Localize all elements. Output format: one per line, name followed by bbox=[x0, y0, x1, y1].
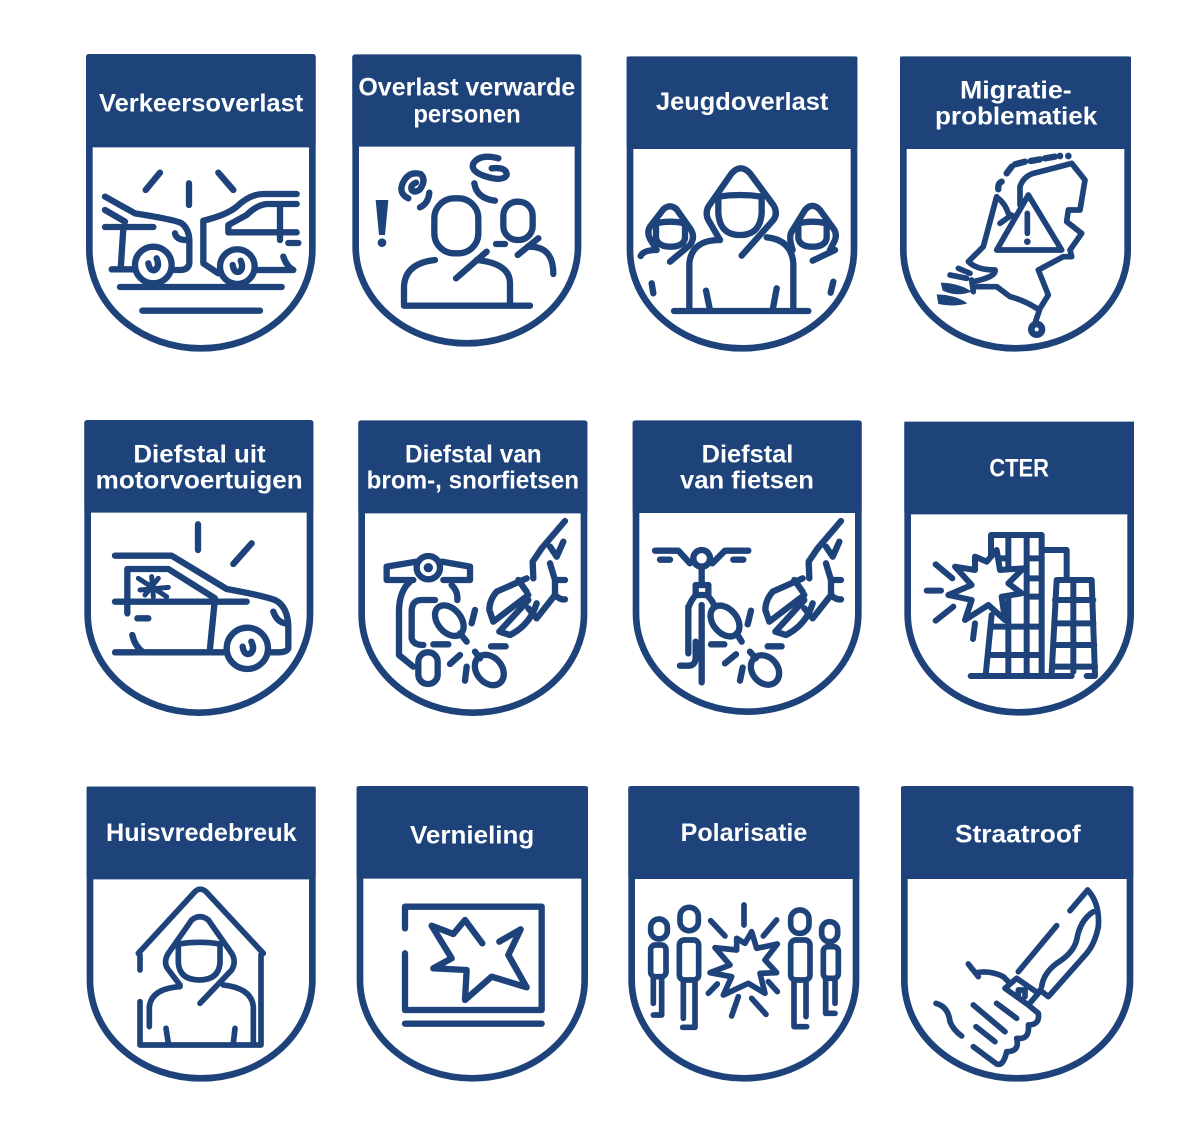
heading: Migratieproblematiek: Migratie- bbox=[960, 76, 1072, 104]
badge: Migratieproblematiek bbox=[900, 56, 1131, 348]
icon: opposing groups with explosion bbox=[651, 905, 838, 1027]
heading: Diefstal van brom-, snorfietsen: brom-, snorfietsen bbox=[367, 466, 579, 494]
icon: car collision bbox=[105, 173, 298, 311]
heading: Vernieling: Vernieling bbox=[410, 821, 534, 849]
heading: Diefstal uit motorvoertuigen: Diefstal uit bbox=[133, 440, 266, 468]
badge: Jeugdoverlast bbox=[627, 56, 857, 348]
heading: Diefstal van fietsen: van fietsen bbox=[680, 466, 814, 494]
heading: Diefstal uit motorvoertuigen: motorvoertuigen bbox=[96, 466, 303, 494]
badge: Verkeersoverlast bbox=[86, 54, 316, 348]
heading: Huisvredebreuk: Huisvredebreuk bbox=[106, 819, 298, 847]
badge: Diefstal van fietsen bbox=[633, 420, 862, 712]
badge: Straatroof bbox=[901, 786, 1133, 1078]
badge: Vernieling bbox=[357, 786, 588, 1078]
badge: Overlast verwarde personen bbox=[352, 54, 581, 343]
heading: Jeugdoverlast: Jeugdoverlast bbox=[656, 88, 829, 116]
badge: Diefstal uit motorvoertuigen bbox=[84, 420, 313, 713]
heading: Diefstal van brom-, snorfietsen: Diefstal van bbox=[405, 440, 542, 468]
icon: confused persons bbox=[376, 157, 553, 306]
heading: Polarisatie: Polarisatie bbox=[681, 819, 807, 847]
heading: Diefstal van fietsen: Diefstal bbox=[702, 440, 793, 468]
icon: hooded person in house bbox=[138, 889, 263, 1045]
heading: Overlast verwarde personen: personen bbox=[413, 100, 521, 128]
badge: CTER bbox=[904, 422, 1134, 712]
heading: Straatroof: Straatroof bbox=[955, 820, 1081, 848]
badge: Huisvredebreuk bbox=[87, 787, 316, 1078]
icon: hooded youths bbox=[641, 168, 836, 311]
badge: Polarisatie bbox=[628, 786, 859, 1078]
icon: car with broken window bbox=[115, 524, 288, 669]
icon: exploding buildings bbox=[927, 535, 1095, 676]
icon: Netherlands map with warning bbox=[937, 153, 1085, 335]
icon: scooter and bolt cutter bbox=[387, 521, 565, 691]
icon: broken window bbox=[405, 907, 542, 1024]
heading: CTER: CTER bbox=[989, 454, 1049, 482]
icon: hand with knife bbox=[936, 890, 1099, 1064]
heading: Overlast verwarde personen: Overlast verwarde bbox=[358, 74, 575, 102]
icon: bicycle and bolt cutter bbox=[655, 521, 841, 690]
heading: Verkeersoverlast: Verkeersoverlast bbox=[99, 90, 304, 118]
heading: Migratieproblematiek: problematiek bbox=[935, 102, 1098, 130]
badge: Diefstal van brom-, snorfietsen bbox=[358, 420, 587, 713]
